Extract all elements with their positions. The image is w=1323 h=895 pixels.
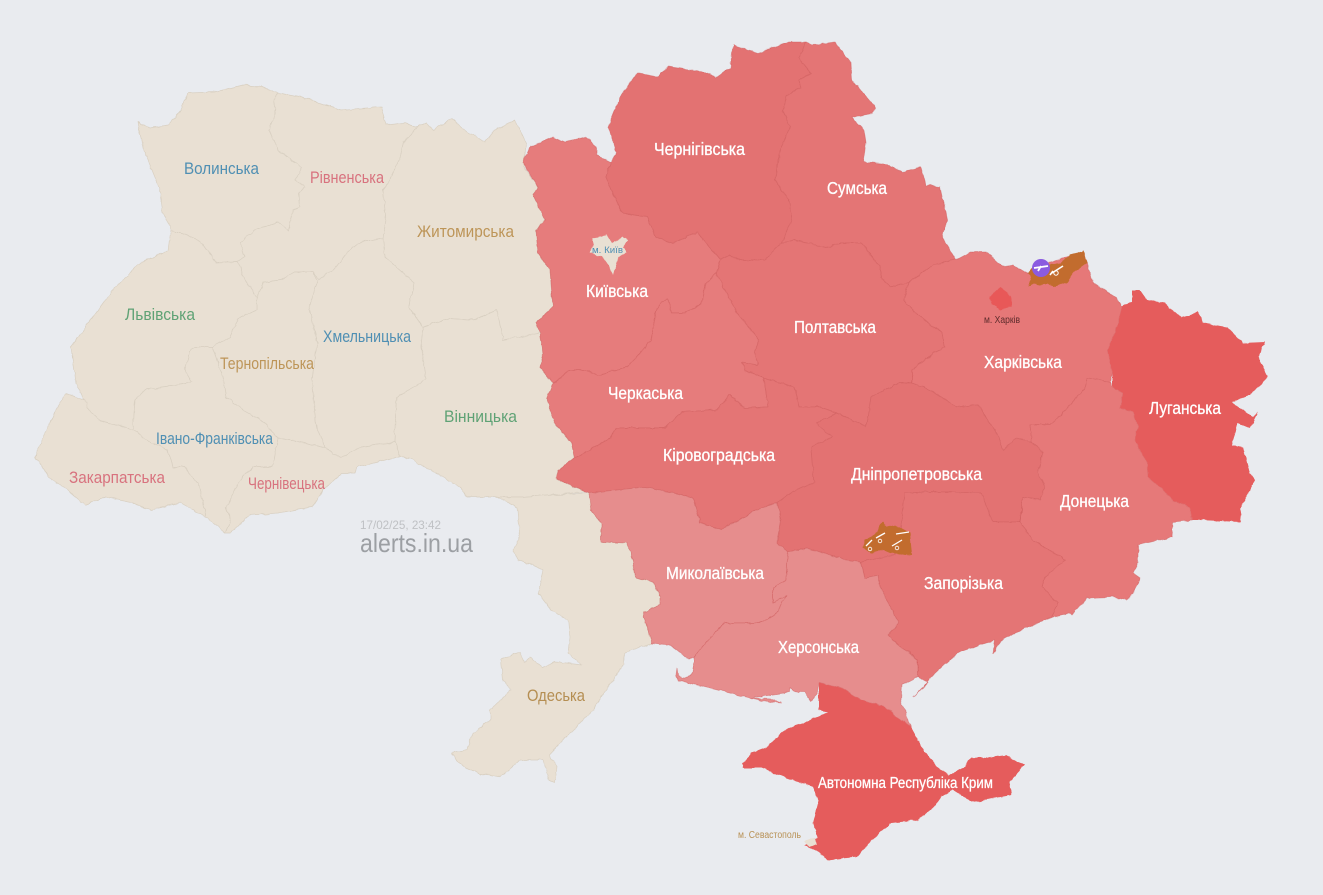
- region: Kharkiv: [904, 252, 1122, 450]
- label: Chernivtsi: Чернівецька: [248, 474, 325, 493]
- label: Kirovohrad: Кіровоградська: [663, 445, 775, 465]
- region: Luhansk: [1108, 290, 1268, 522]
- region: Lviv: [71, 230, 257, 430]
- label: Kyiv oblast: Київська: [586, 281, 648, 301]
- region: Cherkasy: [547, 273, 768, 458]
- label: Dnipropetrovsk: Дніпропетровська: [851, 464, 982, 484]
- site watermark: alerts.in.ua: [360, 528, 473, 558]
- label: Chernihiv: Чернігівська: [654, 139, 745, 159]
- label: Kharkiv: Харківська: [984, 352, 1062, 372]
- region: Kherson: [676, 548, 918, 727]
- label: Cherkasy: Черкаська: [608, 383, 683, 403]
- label: Kharkiv city: м. Харків: [984, 315, 1020, 326]
- label: Poltava: Полтавська: [794, 317, 876, 337]
- label: Volyn: Волинська: [184, 159, 259, 178]
- region: Mykolaiv: [589, 487, 788, 660]
- icon: purple drone circle: [1032, 259, 1050, 277]
- region: Ternopil: [212, 272, 326, 448]
- region: Khmelnytskyi: [309, 238, 426, 458]
- region: Vinnytsia: [395, 310, 585, 497]
- label: Ternopil: Тернопільська: [220, 354, 314, 373]
- region: Zakarpattia: [35, 393, 206, 517]
- icon: artillery Dnipropetrovsk: [866, 532, 909, 551]
- label: Luhansk: Луганська: [1149, 398, 1221, 418]
- label: Khmelnytskyi: Хмельницька: [323, 327, 411, 346]
- region: Zhytomyr: [383, 118, 553, 340]
- label: Lviv: Львівська: [125, 305, 195, 324]
- region: Odesa: [451, 493, 660, 782]
- icon: artillery Kharkiv: [1050, 266, 1063, 275]
- label: Sumy: Сумська: [827, 178, 887, 198]
- occupied zone: Dnipropetrovsk: [863, 522, 912, 555]
- region: Kyiv city: [590, 235, 628, 275]
- label: Zaporizhzhia: Запорізька: [924, 573, 1003, 593]
- label: Kyiv city: м. Київ: [592, 245, 623, 256]
- region: Dnipropetrovsk: [777, 383, 1045, 562]
- region: Sumy: [775, 42, 956, 287]
- region: Kharkiv city: [990, 287, 1012, 310]
- label: Crimea: Автономна Республіка Крим: [818, 775, 993, 792]
- label: Odesa: Одеська: [527, 686, 585, 705]
- label: Zhytomyr: Житомирська: [417, 222, 514, 241]
- label: Mykolaiv: Миколаївська: [666, 563, 764, 583]
- region: Sevastopol: [804, 838, 817, 847]
- occupied zone: north Kharkiv: [1028, 250, 1087, 287]
- label: Rivne: Рівненська: [310, 168, 384, 187]
- label: Zakarpattia: Закарпатська: [69, 468, 165, 487]
- region: Kyiv oblast: [523, 137, 720, 383]
- region: Rivne: [237, 93, 417, 298]
- region: Ivano-Frankivsk: [133, 347, 278, 533]
- label: Donetsk: Донецька: [1060, 491, 1129, 511]
- region: Poltava: [716, 240, 945, 427]
- region: Donetsk: [1020, 378, 1192, 617]
- labels: [69, 139, 1221, 841]
- region: Chernivtsi: [225, 438, 400, 533]
- label: Sevastopol: м. Севастополь: [738, 830, 801, 841]
- region: Kirovohrad: [556, 378, 837, 530]
- timestamp: 17/02/25, 23:42: [360, 518, 441, 532]
- label: Vinnytsia: Вінницька: [444, 407, 518, 426]
- region: Crimea: [742, 683, 1025, 860]
- region: Chernihiv: [606, 42, 811, 260]
- region: Volyn: [138, 85, 305, 263]
- label: Kherson: Херсонська: [778, 637, 859, 657]
- region: Zaporizhzhia: [861, 492, 1065, 697]
- label: Ivano-Frankivsk: Івано-Франківська: [156, 429, 273, 448]
